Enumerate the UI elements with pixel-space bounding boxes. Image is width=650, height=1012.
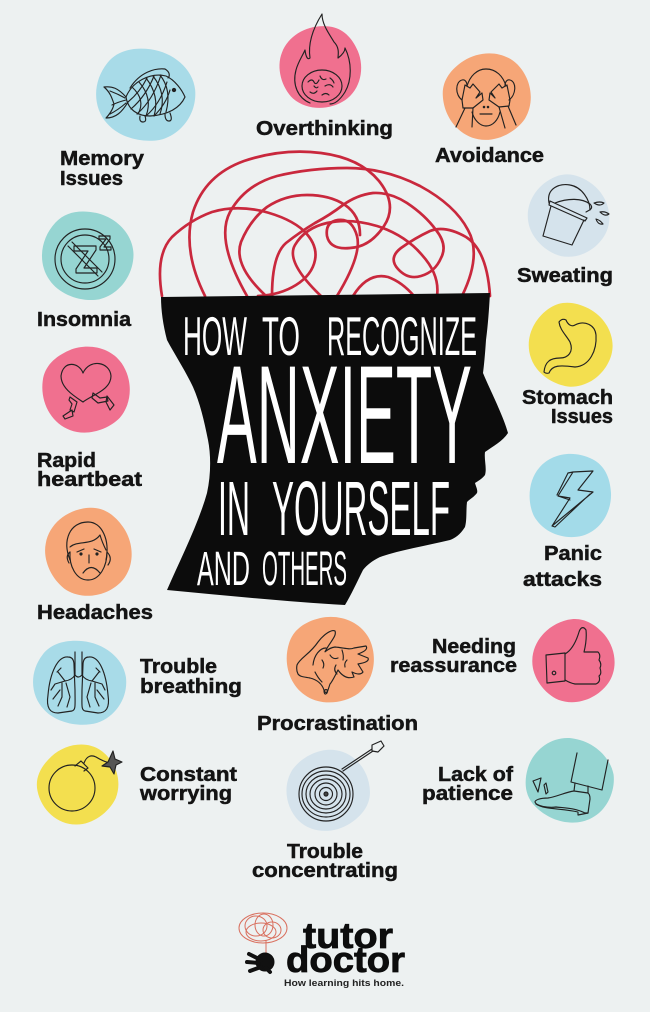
label: Overthinking bbox=[256, 118, 393, 140]
label: Insomnia bbox=[37, 309, 132, 331]
item: headaches bbox=[30, 493, 153, 624]
blob bbox=[89, 41, 202, 148]
black head silhouette with title: OTHERS bbox=[262, 543, 347, 596]
icon: lungs bbox=[47, 652, 109, 713]
icon: fish bbox=[104, 69, 185, 122]
blob bbox=[514, 289, 627, 401]
label: Memory bbox=[60, 148, 145, 170]
label bbox=[252, 841, 398, 882]
blob bbox=[512, 159, 625, 273]
label: Panic bbox=[544, 543, 602, 565]
label: reassurance bbox=[390, 655, 517, 677]
title line 4 bbox=[197, 543, 347, 596]
label: attacks bbox=[523, 569, 602, 591]
black head silhouette with title: RECOGNIZE bbox=[327, 305, 477, 367]
label: worrying bbox=[139, 783, 232, 805]
title line 3: IN bbox=[218, 466, 250, 552]
icon: lightning bolt bbox=[552, 471, 593, 527]
red scribble brain bbox=[160, 152, 490, 297]
blob bbox=[28, 635, 131, 731]
label: Constant bbox=[140, 764, 237, 786]
icon: spilling bucket bbox=[543, 185, 609, 245]
logo scribble bbox=[239, 913, 287, 953]
label: Trouble bbox=[287, 841, 363, 863]
item: sweating bbox=[512, 159, 625, 287]
label: Lack of bbox=[438, 764, 513, 786]
icon: thumbs up bbox=[546, 628, 601, 684]
blob bbox=[515, 726, 625, 835]
blob bbox=[516, 604, 631, 718]
label bbox=[390, 636, 517, 677]
icon: crossed-out Z bbox=[55, 229, 115, 289]
label: Issues bbox=[551, 406, 613, 428]
item: trouble breathing bbox=[28, 635, 242, 731]
item: rapid heartbeat bbox=[31, 334, 142, 491]
label bbox=[140, 656, 242, 698]
logo: tutor doctor bbox=[239, 913, 405, 989]
icon: melting hand bbox=[297, 631, 368, 694]
icon: bomb bbox=[49, 751, 122, 811]
label bbox=[139, 764, 237, 805]
blob bbox=[530, 454, 611, 537]
item: needing reassurance bbox=[390, 604, 631, 718]
label: Procrastination bbox=[257, 713, 418, 735]
icon: stomach bbox=[544, 319, 596, 373]
icon: sad face bbox=[67, 522, 110, 580]
icon: running heart bbox=[61, 363, 114, 419]
label: breathing bbox=[140, 676, 242, 698]
item: overthinking bbox=[256, 14, 393, 140]
label: concentrating bbox=[252, 860, 398, 882]
label: Avoidance bbox=[435, 145, 544, 167]
label bbox=[422, 764, 513, 805]
logo wordmark bbox=[286, 915, 405, 980]
icon: tapping foot bbox=[533, 753, 608, 815]
label: Issues bbox=[60, 168, 123, 190]
label bbox=[522, 387, 613, 428]
label: heartbeat bbox=[37, 469, 142, 491]
blob bbox=[31, 334, 142, 445]
item: avoidance bbox=[428, 38, 546, 167]
item: procrastination bbox=[257, 610, 418, 735]
blob bbox=[32, 202, 143, 310]
blob bbox=[30, 493, 147, 611]
label bbox=[37, 450, 142, 491]
blob bbox=[280, 610, 381, 709]
item: stomach issues bbox=[514, 289, 627, 428]
logo wordmark: tutor bbox=[303, 915, 393, 956]
title line 1 bbox=[183, 305, 477, 367]
item: insomnia bbox=[32, 202, 143, 331]
label: patience bbox=[422, 783, 513, 805]
label: Stomach bbox=[522, 387, 613, 409]
item: panic attacks bbox=[523, 454, 611, 591]
black head silhouette with title bbox=[161, 293, 508, 605]
label bbox=[60, 148, 145, 190]
title line 4: AND bbox=[197, 543, 250, 596]
logo tagline: How learning hits home. bbox=[284, 978, 404, 989]
icon: flaming brain bbox=[295, 14, 350, 104]
label: Needing bbox=[432, 636, 516, 658]
head shape bbox=[161, 293, 508, 605]
blob bbox=[268, 15, 373, 119]
blob bbox=[272, 735, 384, 846]
item: constant worrying bbox=[22, 729, 237, 840]
icon: person covering eyes bbox=[456, 69, 516, 128]
title line 1: HOW bbox=[183, 305, 247, 367]
item: lack of patience bbox=[422, 726, 625, 835]
item: memory issues bbox=[60, 41, 202, 190]
title line 3 bbox=[218, 466, 450, 552]
logo hand bbox=[247, 953, 274, 972]
label: Trouble bbox=[140, 656, 217, 678]
label: Sweating bbox=[517, 265, 613, 287]
blob bbox=[428, 38, 546, 155]
label: Headaches bbox=[37, 602, 153, 624]
icon: target with arrow bbox=[299, 741, 384, 821]
logo wordmark: doctor bbox=[286, 939, 405, 980]
item: trouble concentrating bbox=[252, 735, 398, 882]
blob bbox=[22, 729, 134, 840]
label: Rapid bbox=[37, 450, 96, 472]
label bbox=[523, 543, 602, 591]
title line 1: TO bbox=[262, 305, 300, 367]
